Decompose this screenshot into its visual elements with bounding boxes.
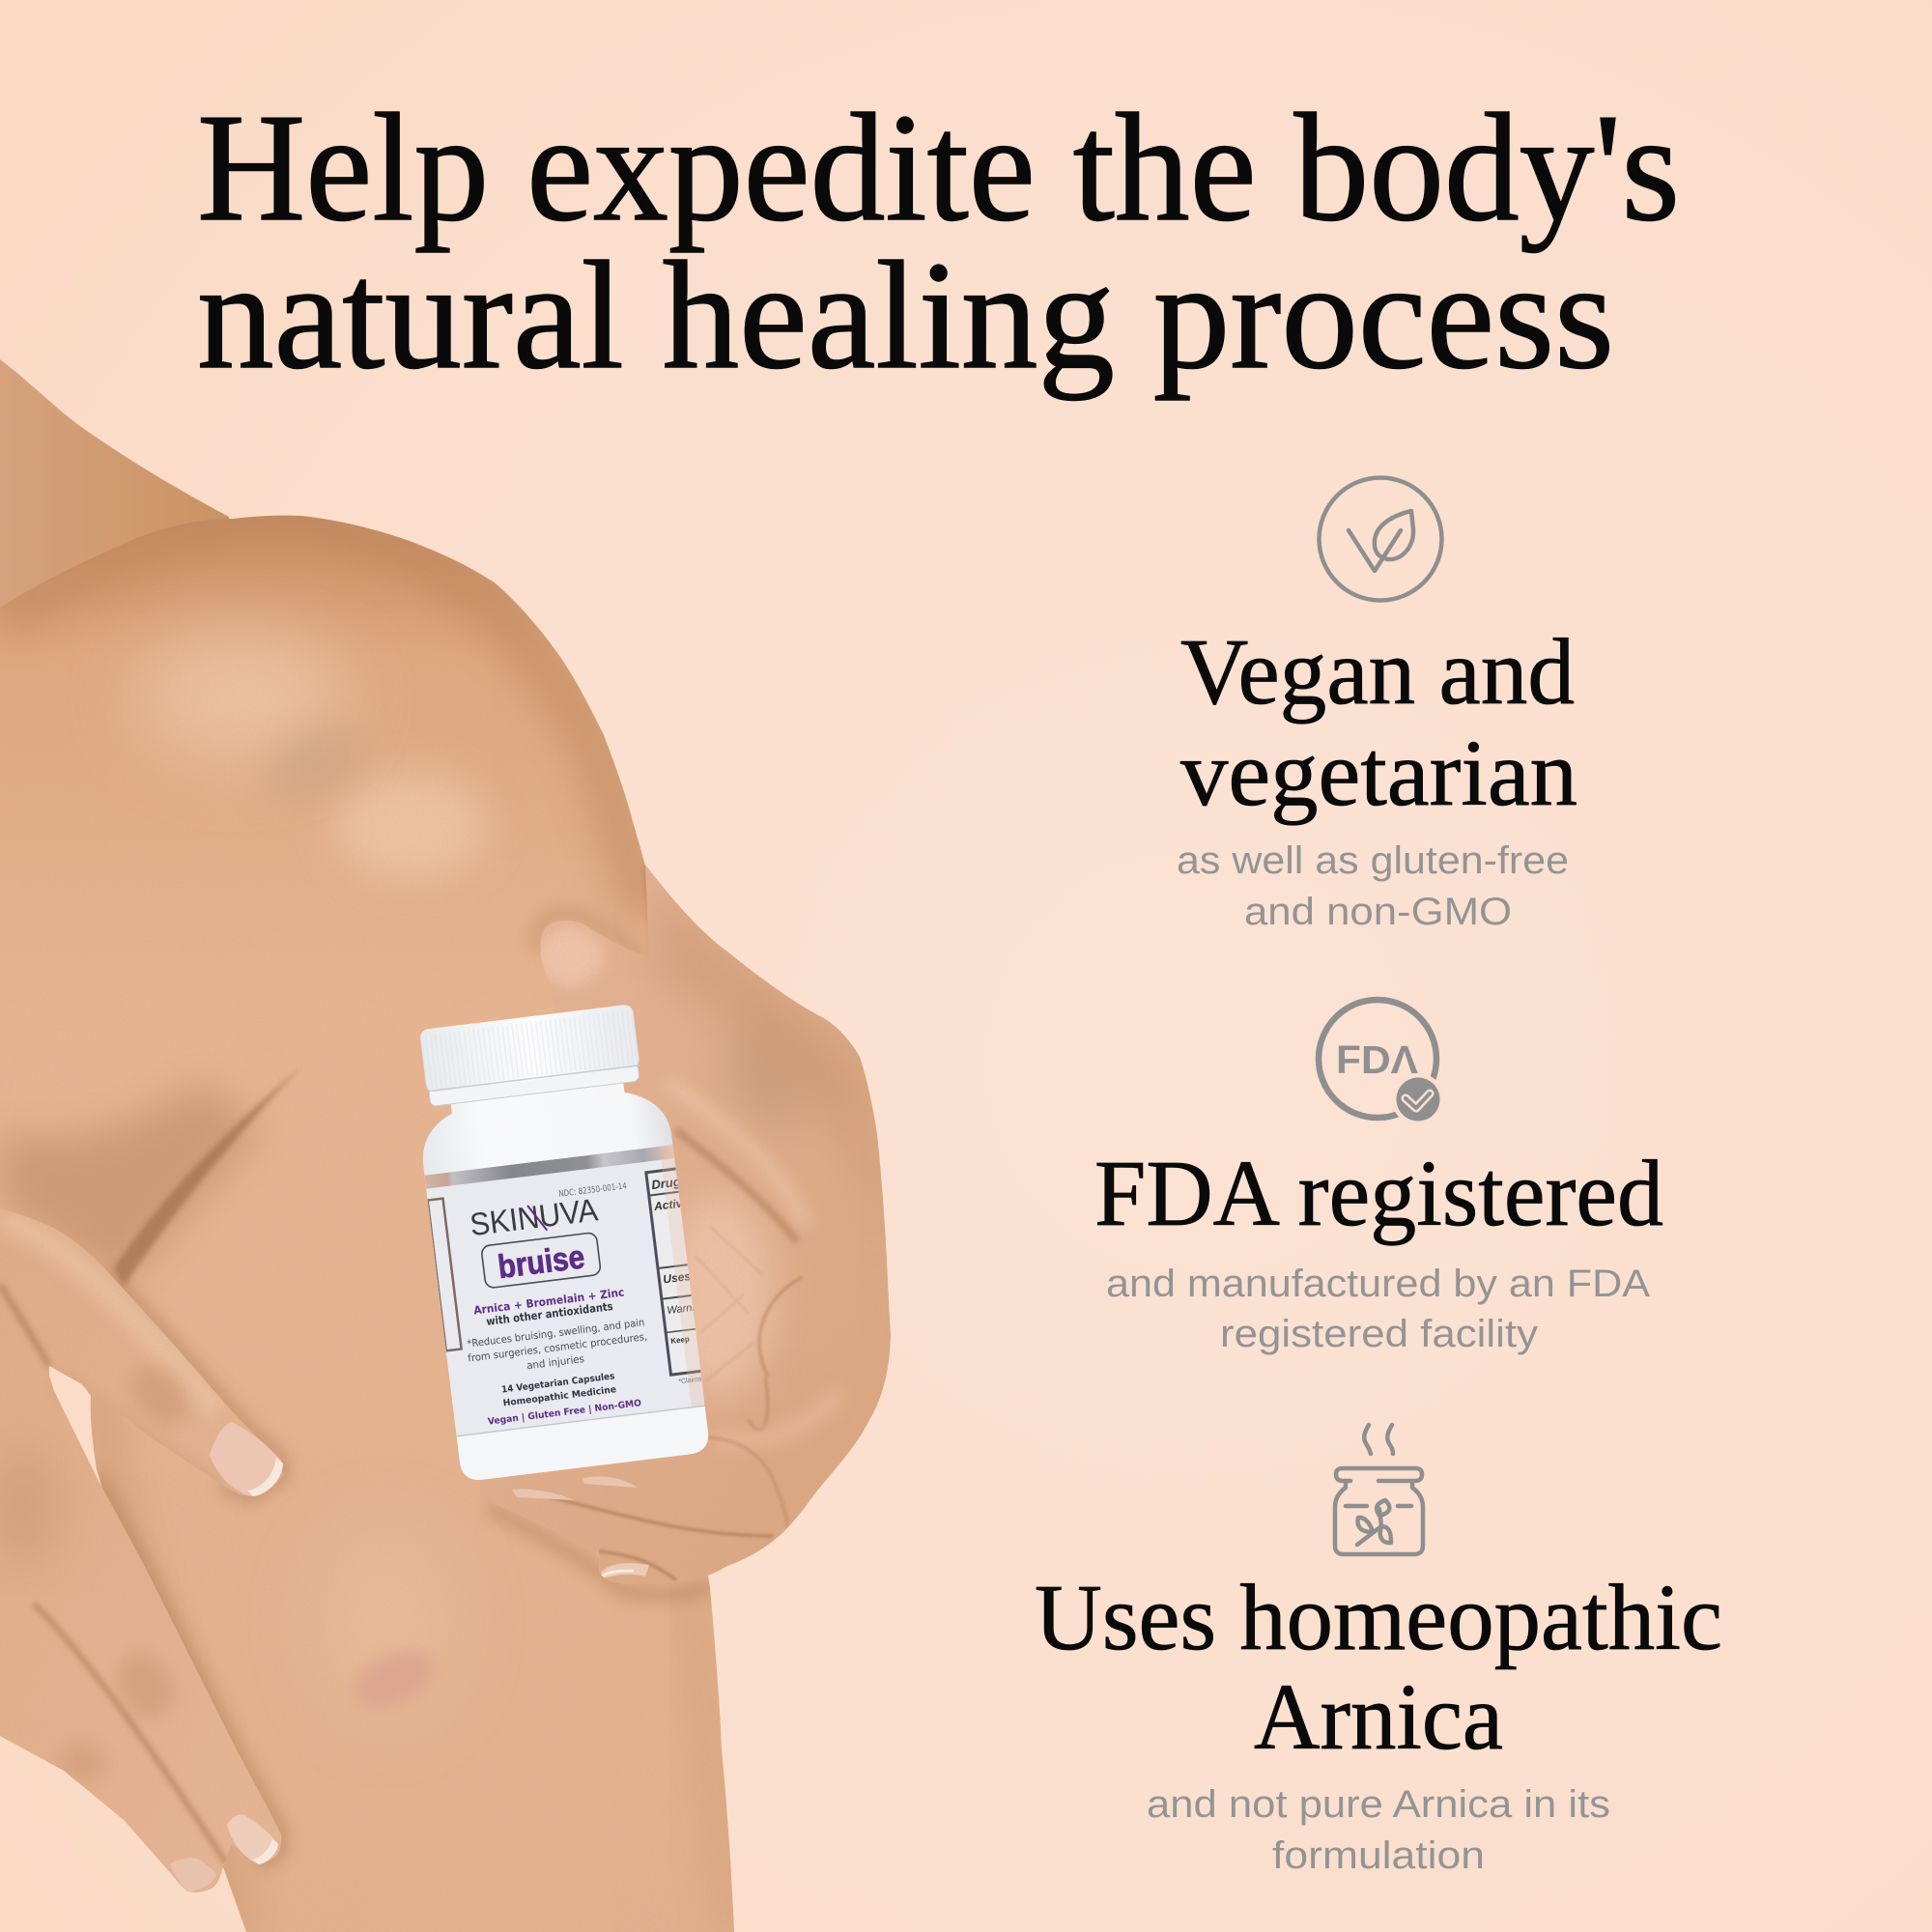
left hand shape [0, 1208, 283, 1892]
heading: uses homeopathic arnica: Arnica [1254, 1665, 1503, 1770]
bottle label panels: Drug [651, 1175, 681, 1192]
bottle label panels: Warnings [667, 1300, 713, 1317]
bottle label text: Arnica + Bromelain + Zinc [473, 1285, 625, 1318]
bruise [345, 1638, 443, 1719]
fingernails [170, 1422, 283, 1891]
bottle label text: bruise [496, 1238, 586, 1286]
bottle label text: NDC: 82350-001-14 [558, 1181, 628, 1200]
subtext: gluten-free: as well as gluten-free [1177, 839, 1569, 882]
bottle label text [449, 1181, 656, 1429]
left hand on leg [0, 1198, 290, 1903]
bottle label panels: Uses [663, 1269, 692, 1286]
heading: FDA registered: FDA registered [1094, 1142, 1663, 1246]
subtext: gluten-free: and non-GMO [1244, 891, 1512, 933]
feature: homeopathic arnica [1035, 1425, 1722, 1877]
title: Help expedite the body's [197, 81, 1680, 253]
bottle label text: SKINUVA [468, 1191, 600, 1242]
bottle [420, 1005, 709, 1480]
icon: FDA badge [1319, 1000, 1444, 1125]
feature: vegan and vegetarian [1177, 477, 1577, 933]
left hand shading [0, 1198, 290, 1903]
bottle label panels: Keep [670, 1335, 690, 1346]
bottle label text: with other antioxidants [486, 1299, 613, 1328]
icon: FDA badge: FDΛ [1336, 1037, 1419, 1082]
photo: arm and hands holding bottle [0, 359, 908, 1932]
heading: vegan and vegetarian: Vegan and [1180, 620, 1575, 724]
left hand shadow [96, 1272, 283, 1864]
title [197, 81, 1680, 401]
feature: FDA registered [1094, 1000, 1663, 1355]
subtext: manufactured: registered facility [1220, 1313, 1538, 1355]
bent leg with knee [0, 483, 753, 1932]
bottle label panels [424, 1143, 729, 1482]
bottle label text: Vegan | Gluten Free | Non-GMO [487, 1398, 642, 1428]
heading: vegan and vegetarian [1180, 620, 1577, 826]
bottle label text: from surgeries, cosmetic procedures, [468, 1331, 648, 1365]
right hand behind bottle [497, 865, 891, 1584]
back limb [0, 359, 232, 618]
bottle body [416, 1076, 711, 1482]
bottle label text: *Reduces bruising, swelling, and pain [467, 1317, 645, 1350]
heading: vegan and vegetarian: vegetarian [1180, 722, 1577, 826]
subtext: manufactured [1106, 1263, 1650, 1355]
bottle label text: 14 Vegetarian Capsules [500, 1371, 615, 1396]
subtext: not pure arnica [1147, 1783, 1610, 1877]
icon: steaming jar [1335, 1425, 1423, 1554]
bottle label text: Homeopathic Medicine [502, 1384, 617, 1409]
subtext: not pure arnica: formulation [1272, 1834, 1485, 1877]
bottle label panels: Active [652, 1196, 690, 1213]
bottle label text: and injuries [526, 1353, 585, 1372]
bottle label panels: *Claims [678, 1376, 702, 1385]
subtext: not pure arnica: and not pure Arnica in its [1147, 1783, 1610, 1826]
bottle cap [419, 1004, 641, 1107]
title: natural healing process [197, 229, 1614, 401]
heading: uses homeopathic arnica: Uses homeopathic [1035, 1566, 1722, 1670]
heading: uses homeopathic arnica [1035, 1566, 1722, 1770]
subtext: manufactured: and manufactured by an FDA [1106, 1263, 1650, 1305]
icon: leaf in circle [1320, 477, 1441, 601]
subtext: gluten-free [1177, 839, 1569, 933]
